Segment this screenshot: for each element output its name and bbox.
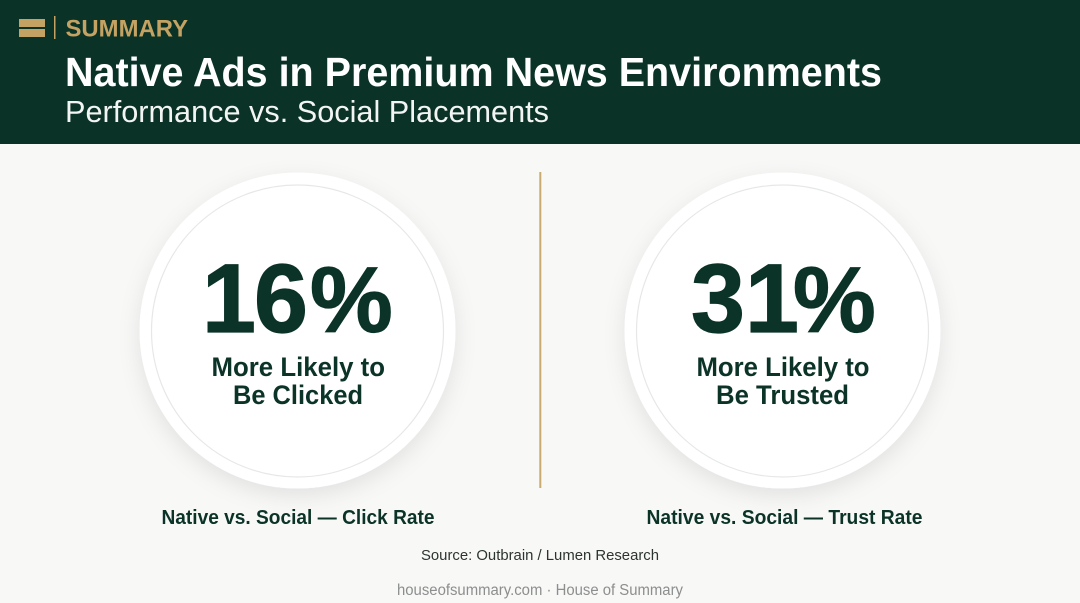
stat number: 16	[202, 244, 308, 353]
stat description: Be Clicked	[233, 380, 363, 410]
circle badge	[624, 172, 940, 488]
stat number: %	[793, 248, 876, 352]
stat number: %	[310, 248, 393, 352]
title: Native Ads in Premium News Environments	[65, 49, 882, 95]
subtitle: Performance vs. Social Placements	[65, 94, 549, 129]
icon: summary bars	[19, 16, 56, 39]
stat number: 31	[691, 244, 799, 353]
stat description: Be Trusted	[716, 380, 849, 410]
center divider	[539, 172, 541, 488]
circle badge	[140, 172, 456, 488]
stat description: More Likely to	[212, 352, 385, 382]
caption: trust rate: Native vs. Social — Trust Rate	[646, 507, 922, 529]
footer: houseofsummary.com · House of Summary	[397, 582, 683, 599]
source: Source: Outbrain / Lumen Research	[421, 547, 659, 564]
panel: trust rate stat	[624, 172, 940, 488]
stat description	[212, 352, 385, 410]
stat description: More Likely to	[696, 352, 870, 382]
panel: click rate stat	[140, 172, 456, 488]
header band	[0, 0, 1080, 144]
brand label: SUMMARY	[66, 16, 188, 42]
caption: click rate: Native vs. Social — Click Rate	[162, 507, 434, 529]
stat description	[696, 352, 870, 410]
